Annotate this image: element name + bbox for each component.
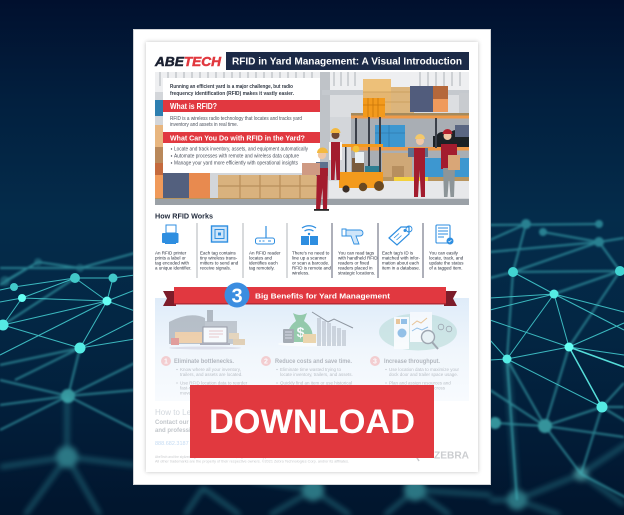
intro text: Running an efficient yard is a major challenge, but radio bbox=[170, 84, 294, 90]
download button: DOWNLOAD bbox=[209, 403, 415, 441]
icon: wireless signal bbox=[301, 226, 318, 245]
title bar bbox=[226, 52, 469, 70]
intro text: frequency identification (RFID) makes it vastly easier. bbox=[170, 91, 294, 97]
worker in red cap bbox=[441, 129, 460, 197]
step: handheld: strategic locations. bbox=[338, 270, 375, 276]
illustration: reports and magnifier bbox=[379, 312, 457, 350]
benefit 3: labor more efficiently across bbox=[389, 386, 446, 390]
capabilities list bbox=[171, 146, 308, 166]
step: database: mation about each bbox=[382, 260, 420, 266]
benefit 1: moves. bbox=[180, 390, 195, 396]
step: database: item in a database. bbox=[382, 266, 420, 270]
step: track: update the status bbox=[429, 260, 464, 266]
title bar: RFID in Yard Management: A Visual Introduction bbox=[232, 56, 462, 68]
contact section: AbeTech and the stylized logo are trademarks of AbeTech, registered in many jurisdictions. bbox=[155, 455, 283, 459]
benefit 1: fast-moving items and schedule bbox=[180, 386, 244, 390]
benefit 1: 1 bbox=[164, 358, 168, 366]
benefit 2: Eliminate time wasted trying to bbox=[280, 367, 342, 372]
benefit 1 bbox=[161, 356, 248, 396]
step: handheld: with handheld RFID bbox=[338, 256, 378, 260]
step: remote: or scan a barcode. bbox=[292, 260, 329, 266]
benefit 3: Increase throughput. bbox=[384, 359, 440, 365]
benefit 1: Eliminate bottlenecks. bbox=[174, 359, 234, 365]
contact section: 888.682.3187 bbox=[155, 441, 189, 447]
step: printer: tag encoded with bbox=[155, 260, 190, 266]
icon: reader bbox=[256, 226, 274, 244]
barrels and tyres bbox=[375, 125, 405, 147]
benefit 1: trailers, and assets are located. bbox=[180, 372, 243, 377]
hero illustration: warehouse yard bbox=[155, 72, 469, 205]
step: printer bbox=[155, 225, 192, 270]
benefit 2: 2 bbox=[264, 358, 268, 366]
benefit 2 bbox=[261, 356, 353, 390]
step: tag bbox=[200, 226, 239, 270]
step: track: of a tagged item. bbox=[429, 266, 463, 270]
capabilities list: Locate and track inventory, assets, and equipment automatically bbox=[174, 146, 308, 152]
step: reader: tag remotely. bbox=[249, 266, 275, 270]
benefit 1: Know where all your inventory, bbox=[180, 367, 241, 372]
heading: what can you do: What Can You Do with RFID in the Yard? bbox=[170, 134, 305, 142]
step: tag: tiny wireless trans- bbox=[200, 256, 238, 260]
badge: number 3 bbox=[224, 282, 250, 308]
left strip goods bbox=[155, 100, 163, 116]
step: reader bbox=[249, 226, 281, 270]
benefit 2: Reduce costs and save time. bbox=[275, 359, 352, 365]
lower left pallets bbox=[163, 173, 189, 198]
infographic sheet bbox=[146, 42, 478, 472]
worker in overalls bbox=[408, 134, 428, 197]
worker in white shirt bbox=[329, 128, 342, 180]
capabilities list: Automate processes with remote and wireless data capture bbox=[174, 154, 299, 160]
banner: 3 big benefits: Big Benefits for Yard Management bbox=[255, 292, 391, 300]
upper shelf goods bbox=[363, 79, 391, 92]
heading: what is RFID: What is RFID? bbox=[170, 102, 217, 111]
capabilities list: Manage your yard more efficiently with operational insights bbox=[174, 160, 298, 166]
panel: benefits bbox=[155, 298, 469, 401]
step: tag: Each tag contains bbox=[200, 250, 237, 256]
benefit 3 bbox=[370, 356, 460, 396]
benefit 3: 3 bbox=[373, 358, 377, 366]
step: handheld: readers or fixed bbox=[338, 260, 370, 266]
document card bbox=[133, 29, 491, 485]
contact section: and professional services bbox=[155, 428, 229, 434]
floor bbox=[329, 181, 469, 198]
step: handheld: readers placed in bbox=[338, 266, 373, 270]
illustration: money bag and falling chart: $ bbox=[297, 324, 305, 340]
benefit 2: data to avoid unnecessary costs. bbox=[280, 386, 346, 390]
step: track bbox=[429, 225, 464, 270]
step: database: matched with infor- bbox=[382, 256, 421, 260]
benefit 2: locate inventory, trailers, and assets. bbox=[280, 372, 353, 377]
illustration: money bag and falling chart bbox=[278, 312, 353, 346]
step: handheld: You can read tags bbox=[338, 250, 375, 256]
logo: Zebra bbox=[414, 450, 469, 462]
step: tag: mitters to send and bbox=[200, 260, 239, 266]
step: reader: locates and bbox=[249, 256, 273, 260]
benefit 3: Plan and assign resources and bbox=[389, 380, 451, 386]
logo: AbeTech: ABETECH bbox=[154, 55, 222, 69]
icon: checklist bbox=[436, 225, 454, 244]
benefit 3: Use location data to maximize your bbox=[389, 367, 460, 372]
step: printer: prints a label or bbox=[155, 256, 186, 260]
contact section: All other trademarks are the property of their respective owners. ©2021 Zebra Technologies Corp. and/or its affiliates. bbox=[155, 460, 349, 464]
icon: price tag bbox=[389, 226, 412, 245]
step: database: Each tag's ID is bbox=[382, 250, 414, 256]
step: remote: RFID is remote and bbox=[292, 266, 332, 270]
forklift bbox=[339, 98, 385, 193]
icon: printer bbox=[162, 225, 178, 244]
definition text: RFID is a wireless radio technology that locates and tracks yard bbox=[170, 116, 302, 122]
definition text bbox=[170, 116, 302, 128]
intro text bbox=[170, 84, 294, 97]
banner: 3 big benefits bbox=[163, 282, 457, 308]
benefit 2: Quickly find an item or use historical bbox=[280, 380, 352, 386]
step: remote: There's no need to bbox=[292, 250, 330, 256]
contact section bbox=[155, 408, 349, 464]
step: printer: An RFID printer bbox=[155, 250, 187, 256]
step: printer: a unique identifier. bbox=[155, 266, 192, 270]
dividers bbox=[197, 223, 287, 278]
definition text: inventory and assets in real time. bbox=[170, 122, 238, 128]
worker with box bbox=[302, 148, 329, 211]
download button bbox=[190, 385, 434, 458]
step: reader: identifies each bbox=[249, 260, 278, 266]
network graphic bbox=[0, 219, 624, 515]
step: reader: An RFID reader bbox=[249, 250, 281, 256]
step: track: locate, track, and bbox=[429, 256, 464, 260]
step: remote: wireless. bbox=[292, 270, 310, 276]
icon: handheld scanner bbox=[342, 229, 363, 244]
step: track: You can easily bbox=[429, 250, 459, 256]
heading: what is RFID bbox=[163, 100, 320, 112]
benefit 1: Use RFID location data to reorder bbox=[180, 380, 248, 386]
sheet shadow bbox=[146, 42, 478, 472]
intro panel bbox=[163, 78, 320, 173]
benefit 3: your yard. bbox=[389, 390, 409, 396]
logo: Zebra: ZEBRA bbox=[434, 450, 469, 462]
contact section: Contact our RFID experts bbox=[155, 420, 228, 426]
step: handheld bbox=[338, 229, 378, 276]
step: database bbox=[382, 226, 421, 270]
illustration: warehouse and laptop bbox=[169, 310, 245, 350]
benefit 3: dock door and trailer space usage. bbox=[389, 372, 458, 377]
heading: how RFID works: How RFID Works bbox=[155, 212, 213, 220]
step: remote: line up a scanner bbox=[292, 256, 327, 260]
icon: rfid tag bbox=[212, 226, 228, 242]
step: tag: receive signals. bbox=[200, 266, 231, 270]
step: remote bbox=[292, 226, 332, 276]
badge: number 3: 3 bbox=[231, 286, 243, 308]
contact section: How to Learn More bbox=[155, 408, 224, 417]
